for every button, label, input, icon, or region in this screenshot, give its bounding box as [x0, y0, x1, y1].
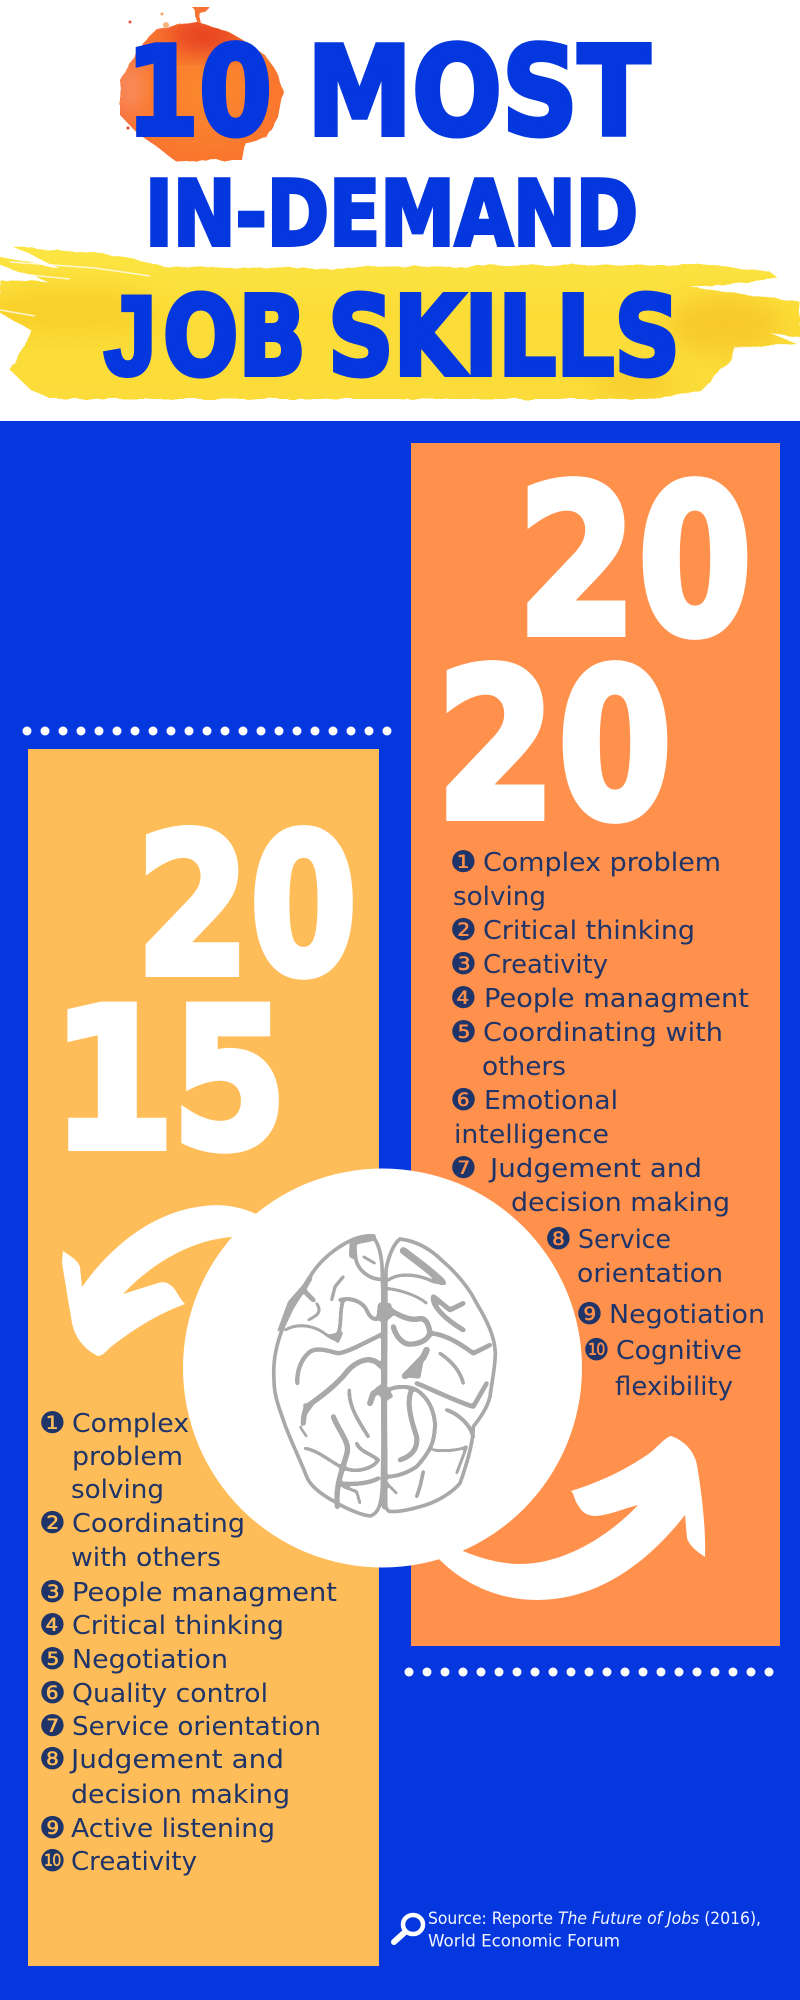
- source text: World Economic Forum: [428, 1932, 620, 1952]
- skills list 2020: ❹: [450, 981, 477, 1016]
- year 2020: [436, 442, 752, 866]
- skills list 2015: solving: [71, 1475, 164, 1505]
- left hemisphere: [274, 1236, 384, 1516]
- skills list 2020: flexibility: [615, 1372, 733, 1402]
- arrow: curving to 2015 list: [62, 1205, 290, 1356]
- year 2015: 1: [51, 967, 175, 1193]
- skills list 2015: decision making: [71, 1780, 290, 1810]
- right hemisphere: [384, 1239, 495, 1512]
- skills list 2015: ❸: [39, 1575, 66, 1610]
- skills list 2015: ❽: [39, 1742, 66, 1777]
- skills list 2020: decision making: [511, 1188, 730, 1218]
- skills list 2015: ❹: [39, 1608, 66, 1643]
- skills list 2020: ❾: [576, 1297, 603, 1332]
- year 2015: 2: [136, 793, 250, 1019]
- year 2020: 0: [558, 626, 672, 866]
- skills list 2020: People managment: [484, 984, 749, 1014]
- skills list 2020: Critical thinking: [483, 916, 695, 946]
- skills list 2015: ❼: [39, 1709, 66, 1744]
- skills list 2015: problem: [72, 1442, 183, 1472]
- skills list 2020: ❸: [450, 947, 477, 982]
- title line: IN-DEMAND: IN-DEMAND: [145, 162, 638, 267]
- skills list 2015: ❿: [39, 1844, 66, 1879]
- skills list 2015: [39, 1406, 337, 1879]
- year 2020: 0: [638, 442, 752, 682]
- skills list 2020: orientation: [577, 1259, 723, 1289]
- white circle: [183, 1168, 582, 1568]
- year 2015: [51, 793, 357, 1193]
- source text: Source: Reporte The Future of Jobs (2016),: [428, 1909, 761, 1929]
- skills list 2020: Emotional: [484, 1086, 618, 1116]
- skills list 2015: People managment: [72, 1578, 337, 1608]
- skills list 2015: Negotiation: [72, 1645, 228, 1675]
- skills list 2015: ❺: [39, 1642, 66, 1677]
- dotted row above 2015 panel: [22, 726, 392, 736]
- year 2020: 2: [517, 442, 637, 682]
- skills list 2020: Negotiation: [609, 1300, 765, 1330]
- skills list 2015: ❷: [39, 1506, 66, 1541]
- white header background: [0, 0, 800, 421]
- skills list 2020: ❻: [450, 1083, 477, 1118]
- skills list 2015: with others: [71, 1543, 221, 1573]
- year 2020: 2: [436, 626, 556, 866]
- skills list 2020: Complex problem: [483, 848, 721, 878]
- skills list 2015: Quality control: [72, 1679, 268, 1709]
- skills list 2020: Service: [578, 1225, 671, 1255]
- skills list 2015: Active listening: [71, 1814, 275, 1844]
- icon: brain: [274, 1236, 495, 1516]
- skills list 2020: intelligence: [454, 1120, 609, 1150]
- brush streak gaps: [0, 262, 150, 316]
- title line: JOB SKILLS: [104, 272, 680, 400]
- skills list 2020: ❶: [450, 845, 477, 880]
- icon: magnifying glass: [394, 1915, 423, 1942]
- skills list 2020: Cognitive: [616, 1336, 742, 1366]
- source note: [394, 1909, 761, 1952]
- skills list 2020: ❽: [545, 1222, 572, 1257]
- skills list 2015: Critical thinking: [72, 1611, 284, 1641]
- skills list 2015: ❶: [39, 1406, 66, 1441]
- skills list 2015: Creativity: [71, 1847, 197, 1877]
- skills list 2015: Coordinating: [72, 1509, 245, 1539]
- year 2015: 5: [172, 967, 287, 1193]
- arrow: curving to 2020 panel: [420, 1436, 705, 1600]
- title line: 10 MOST: 10: [126, 22, 272, 164]
- skills list 2015: Service orientation: [72, 1712, 321, 1742]
- title line: 10 MOST: MOST: [307, 22, 650, 164]
- skills list 2020: Creativity: [483, 950, 608, 980]
- skills list 2020: ❷: [450, 913, 477, 948]
- dotted row below 2020 panel: [404, 1668, 774, 1676]
- skills list 2020: [450, 845, 765, 1402]
- orange paint splash: [118, 7, 283, 162]
- skills list 2015: ❾: [39, 1811, 66, 1846]
- skills list 2020: ❼: [450, 1151, 477, 1186]
- title line: JOB SKILLS: SKILLS: [328, 272, 680, 400]
- skills list 2020: Judgement and: [488, 1154, 702, 1184]
- skills list 2015: ❻: [39, 1676, 66, 1711]
- source text: [428, 1909, 761, 1952]
- title line: JOB SKILLS: OB: [163, 272, 306, 400]
- skills list 2020: others: [482, 1052, 566, 1082]
- skills list 2015: Complex: [72, 1409, 189, 1439]
- skills list 2020: ❿: [583, 1333, 610, 1368]
- skills list 2020: Coordinating with: [483, 1018, 723, 1048]
- panel: 2020: [411, 442, 780, 1646]
- cortical fissures: [277, 1237, 490, 1507]
- skills list 2020: solving: [453, 882, 546, 912]
- title line: 10 MOST: [126, 22, 650, 164]
- panel: 2015: [28, 749, 379, 1966]
- skills list 2020: ❺: [450, 1015, 477, 1050]
- skills list 2015: Judgement and: [69, 1745, 284, 1775]
- yellow brush stroke: [0, 247, 800, 399]
- title line: JOB SKILLS: J: [104, 274, 156, 398]
- blue background panel: [0, 421, 800, 2000]
- title: [104, 22, 680, 400]
- year 2015: 0: [250, 793, 357, 1019]
